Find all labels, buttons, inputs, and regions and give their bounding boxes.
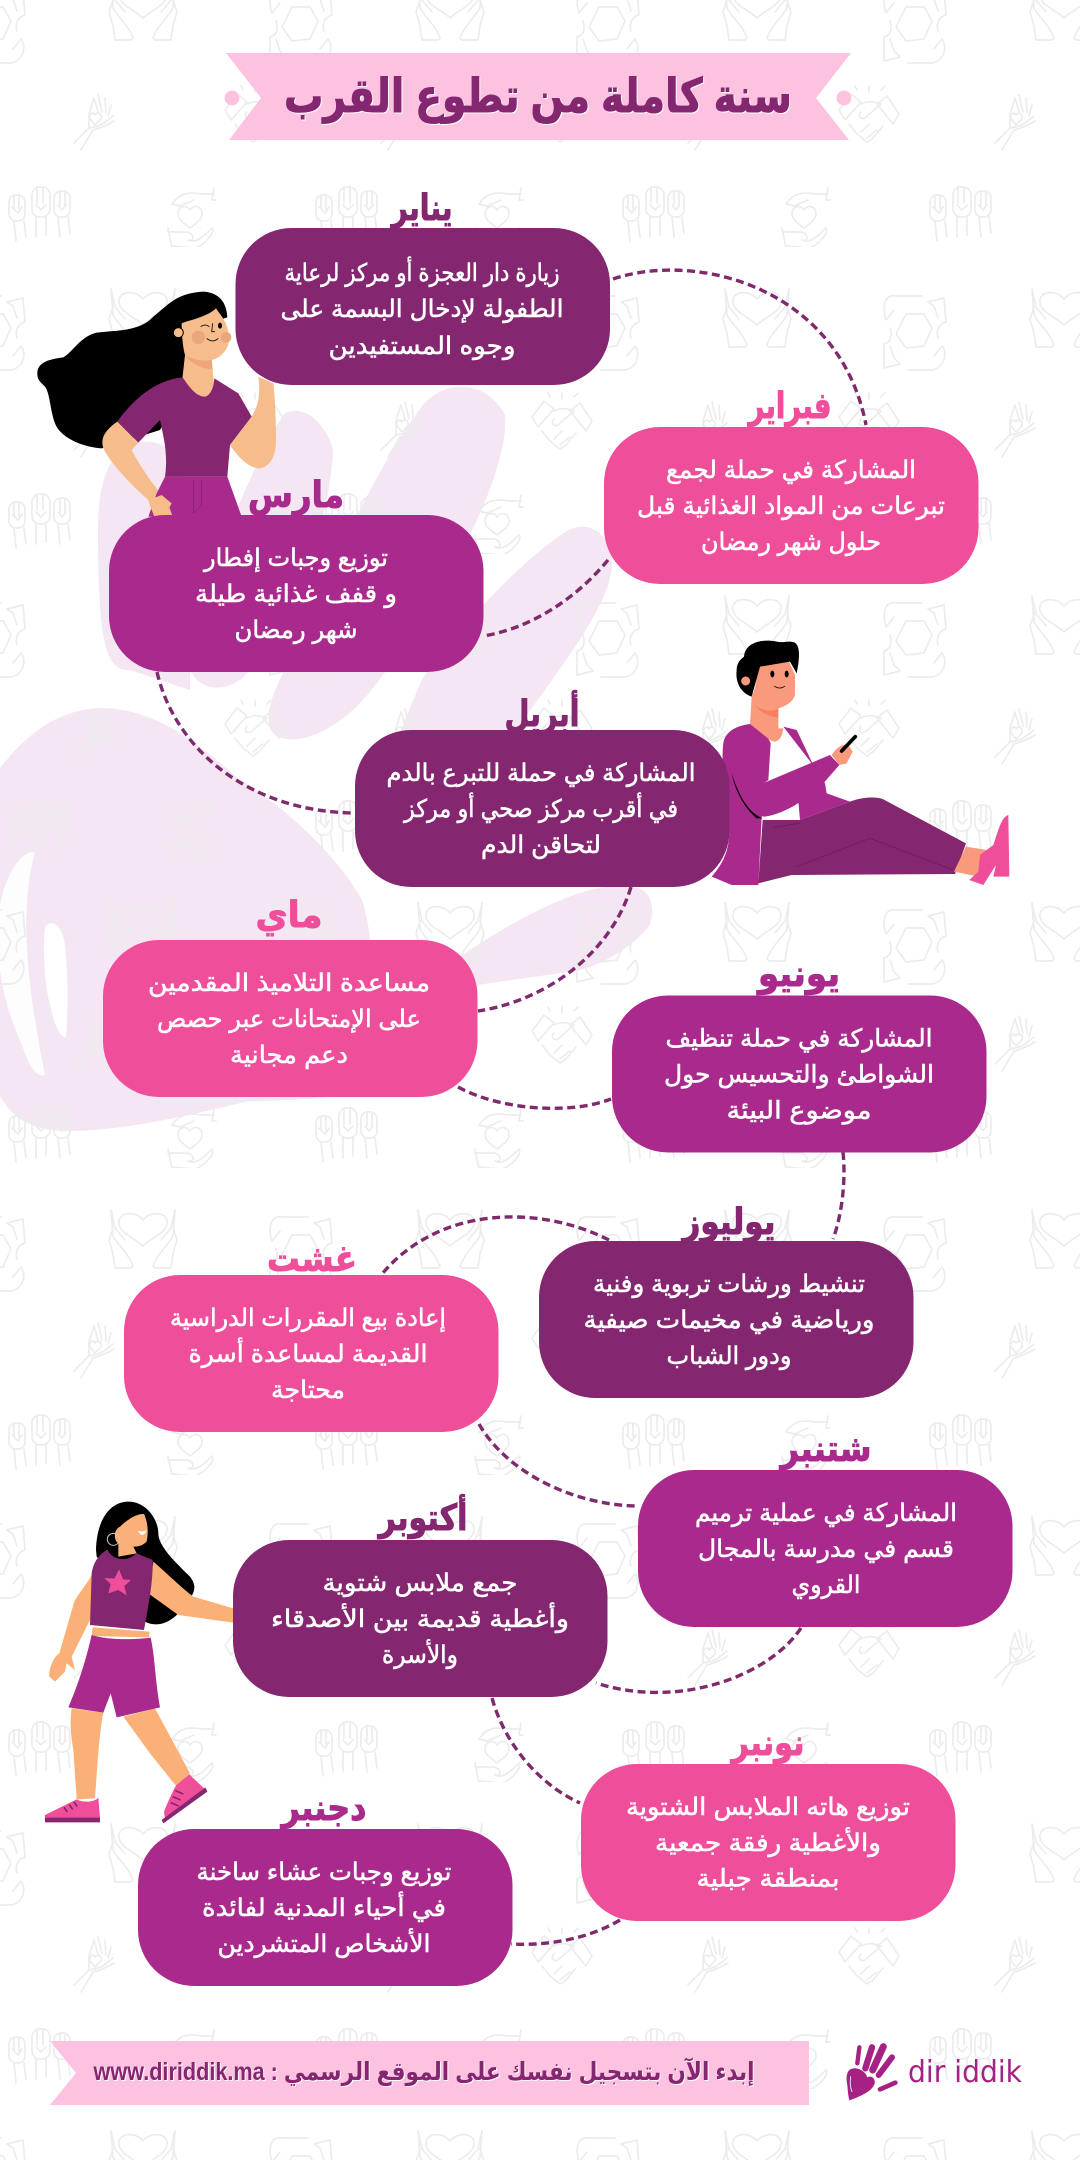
- box: [138, 1829, 512, 1986]
- panel: August: [124, 1238, 498, 1432]
- panel: July: [539, 1201, 914, 1398]
- panel: November: [581, 1722, 956, 1921]
- text: تبرعات من المواد الغذائية قبل: [637, 493, 945, 520]
- text: لتحاقن الدم: [481, 832, 601, 859]
- heading: June: يونيو: [756, 953, 840, 995]
- text: المشاركة في حملة للتبرع بالدم: [386, 760, 696, 787]
- decorative hand blob: [0, 387, 652, 1131]
- text: [195, 545, 397, 644]
- panel: May: [103, 894, 478, 1097]
- panel: April: [355, 690, 730, 887]
- panel: September: [638, 1428, 1012, 1627]
- text: القديمة لمساعدة أسرة: [188, 1338, 428, 1368]
- text: [196, 1859, 452, 1958]
- box: [612, 996, 986, 1152]
- text: و قفف غذائية طيلة: [195, 581, 397, 608]
- box: [604, 427, 978, 584]
- text: [584, 1271, 874, 1370]
- text: [271, 1570, 569, 1669]
- heading: August: غشت: [267, 1238, 357, 1279]
- icon: hand with heart: [847, 2047, 895, 2100]
- logo: dir iddik: [847, 2047, 1023, 2100]
- text: في أحياء المدنية لفائدة: [202, 1892, 446, 1922]
- text: [170, 1305, 446, 1404]
- text: بمنطقة جبلية: [696, 1866, 840, 1892]
- box: [233, 1540, 608, 1697]
- text: وجوه المستفيدين: [328, 333, 516, 360]
- text: القروي: [792, 1572, 860, 1599]
- text: المشاركة في حملة لجمع: [666, 457, 916, 484]
- panel: June: [612, 953, 986, 1152]
- text: محتاجة: [271, 1377, 345, 1404]
- text: المشاركة في عملية ترميم: [695, 1500, 957, 1527]
- text: تنشيط ورشات تربوية وفنية: [593, 1271, 865, 1298]
- text: في أقرب مركز صحي أو مركز: [402, 793, 678, 823]
- heading: December: دجنبر: [280, 1787, 366, 1829]
- text: زيارة دار العجزة أو مركز لرعاية: [284, 257, 560, 287]
- text: [626, 1794, 910, 1892]
- text: والأغطية رفقة جمعية: [655, 1827, 881, 1857]
- panel: December: [138, 1787, 512, 1986]
- heading: July: يوليوز: [681, 1201, 776, 1243]
- heading: October: أكتوبر: [377, 1494, 468, 1539]
- heading: May: ماي: [256, 894, 322, 936]
- heading: April: أبريل: [504, 690, 580, 735]
- text: على الإمتحانات عبر حصص: [157, 1006, 421, 1033]
- text: شهر رمضان: [234, 617, 358, 644]
- text: [695, 1500, 957, 1599]
- text: والأسرة: [382, 1639, 458, 1669]
- panel: October: [233, 1494, 608, 1697]
- heading: February: فبراير: [747, 385, 832, 427]
- heading: March: مارس: [248, 474, 344, 516]
- title banner: [225, 53, 851, 140]
- character: walking woman with star top: [45, 1502, 233, 1823]
- box: [103, 940, 478, 1097]
- text: الشواطئ والتحسيس حول: [664, 1062, 934, 1088]
- text: توزيع وجبات عشاء ساخنة: [196, 1859, 452, 1886]
- heading: September: شتنبر: [779, 1428, 872, 1470]
- heading: January: يناير: [390, 187, 452, 229]
- panel: March: [109, 474, 484, 672]
- text: قسم في مدرسة بالمجال: [698, 1536, 954, 1563]
- box: [355, 730, 730, 887]
- footer banner: [50, 2041, 809, 2105]
- text: المشاركة في حملة تنظيف: [666, 1026, 932, 1052]
- title banner: سنة كاملة من تطوع القرب: [284, 69, 792, 124]
- panel: January: [236, 187, 610, 385]
- text: توزيع هاته الملابس الشتوية: [626, 1794, 910, 1821]
- text: جمع ملابس شتوية: [322, 1570, 518, 1597]
- text: [148, 970, 430, 1069]
- box: [109, 515, 484, 672]
- box: [236, 228, 610, 385]
- connectors: dashed year path: [157, 270, 866, 1944]
- box: [638, 1470, 1012, 1627]
- panel: February: [604, 385, 978, 584]
- text: ورياضية في مخيمات صيفية: [584, 1307, 874, 1334]
- character: seated man with phone: [712, 641, 1009, 885]
- character: winking woman: [37, 292, 276, 525]
- text: [280, 257, 564, 360]
- text: الأشخاص المتشردين: [218, 1928, 430, 1958]
- box: [539, 1241, 914, 1398]
- text: توزيع وجبات إفطار: [202, 545, 388, 573]
- text: إعادة بيع المقررات الدراسية: [170, 1305, 446, 1333]
- text: وأغطية قديمة بين الأصدقاء: [271, 1603, 569, 1633]
- box: [581, 1764, 956, 1921]
- text: ودور الشباب: [666, 1343, 792, 1370]
- wordmark: dir iddik: [908, 2055, 1023, 2090]
- text: دعم مجانية: [230, 1042, 348, 1069]
- text: مساعدة التلاميذ المقدمين: [148, 970, 430, 997]
- text: [637, 457, 945, 556]
- box: [124, 1275, 498, 1432]
- text: موضوع البيئة: [726, 1098, 872, 1124]
- text: [386, 760, 696, 859]
- text: [664, 1026, 934, 1124]
- footer banner: إبدء الآن بتسجيل نفسك على الموقع الرسمي : www.diriddik.ma: [93, 2057, 754, 2087]
- text: الطفولة لإدخال البسمة على: [280, 296, 564, 323]
- text: حلول شهر رمضان: [701, 529, 881, 556]
- heading: November: نونبر: [730, 1722, 804, 1764]
